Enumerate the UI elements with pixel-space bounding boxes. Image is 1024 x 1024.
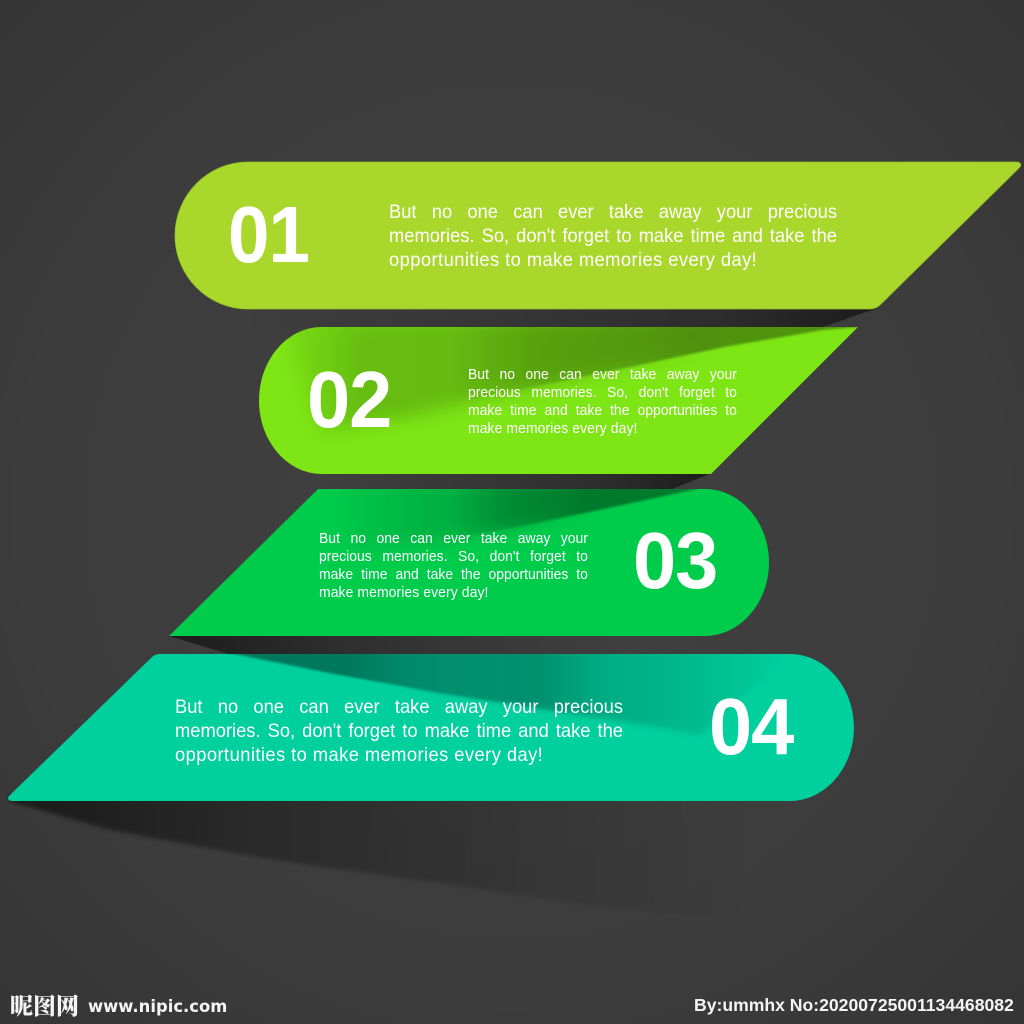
number 02: 02	[307, 355, 391, 444]
number 04: 04	[709, 682, 793, 771]
text block 3: precious memories. So, don't forget to	[319, 548, 588, 565]
text block 1	[389, 201, 837, 271]
text block 4: memories. So, don't forget to make time and take the	[175, 720, 623, 742]
watermark id: By:ummhx No:20200725001134468082	[694, 995, 1014, 1015]
text block 2: precious memories. So, don't forget to	[468, 384, 737, 401]
text block 4: opportunities to make memories every day!	[175, 744, 543, 766]
panel 4 shape	[8, 645, 854, 801]
panel 3 shape	[169, 480, 769, 636]
cast shadows on background	[9, 308, 878, 925]
number 01: 01	[228, 190, 309, 279]
number 03: 03	[633, 516, 717, 605]
text block 3: make memories every day!	[319, 584, 488, 601]
text block 1: opportunities to make memories every day!	[389, 249, 757, 271]
text block 3: But no one can ever take away your	[319, 530, 588, 547]
text block 3: make time and take the opportunities to	[319, 566, 588, 583]
text block 4: But no one can ever take away your precious	[175, 696, 623, 718]
text block 4	[175, 696, 623, 766]
text block 2: make time and take the opportunities to	[468, 402, 737, 419]
text block 2: But no one can ever take away your	[468, 366, 737, 383]
text block 1: memories. So, don't forget to make time and take the	[389, 225, 837, 247]
watermark logo text: 昵图网	[10, 988, 79, 1021]
panel 2 shape	[259, 320, 858, 474]
text block 3	[319, 530, 588, 601]
text block 2: make memories every day!	[468, 420, 637, 437]
watermark url: www.nipic.com	[88, 997, 227, 1017]
text block 1: But no one can ever take away your precious	[389, 201, 837, 223]
panel 1 shape	[175, 162, 1021, 309]
text block 2	[468, 366, 737, 437]
background with panels and shadows	[8, 162, 1022, 878]
